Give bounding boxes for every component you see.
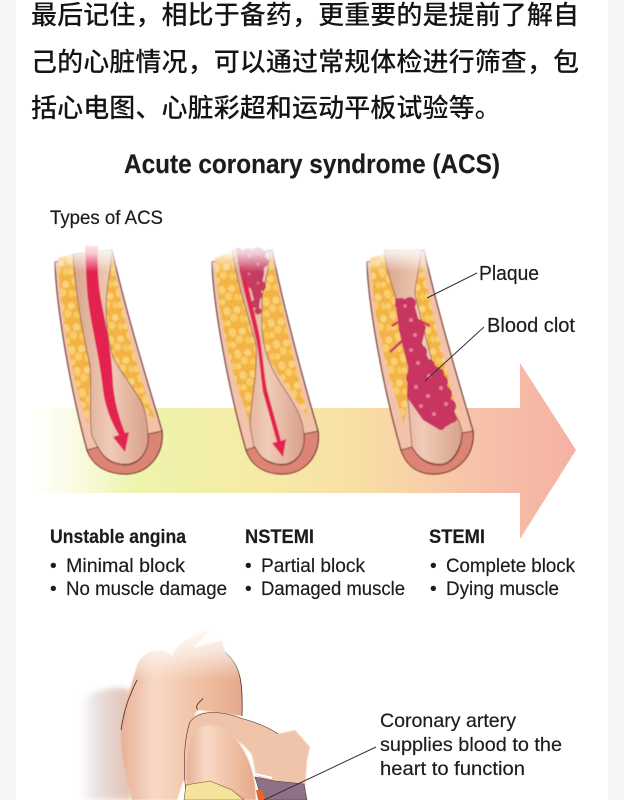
artery: NSTEMI [212, 247, 318, 474]
heart illustration [80, 625, 310, 800]
intro paragraph: 己的心脏情况，可以通过常规体检进行筛查，包 [31, 46, 579, 76]
severity arrow [30, 363, 576, 539]
artery: STEMI [367, 250, 473, 474]
column: NSTEMI: • [245, 579, 252, 600]
white vessel highlight [256, 774, 272, 778]
label: plaque: Plaque [479, 263, 539, 285]
fade over artery tops [45, 238, 435, 272]
label: coronary artery [264, 710, 562, 800]
partial clot [238, 247, 268, 314]
subheading: types of ACS: Types of ACS [50, 207, 163, 229]
column: unstable angina [50, 527, 227, 600]
orange artery [256, 790, 266, 800]
column: unstable angina: Unstable angina [50, 527, 186, 548]
column: NSTEMI: • [245, 556, 252, 577]
column: unstable angina: No muscle damage [66, 579, 227, 600]
complete clot [390, 297, 457, 430]
label: blood clot [425, 315, 575, 381]
pulmonary artery [186, 712, 310, 790]
column: unstable angina: Minimal block [66, 556, 186, 577]
column: NSTEMI: Damaged muscle [261, 579, 405, 600]
label: coronary artery: Coronary artery [380, 710, 516, 732]
label: blood clot: Blood clot [487, 315, 575, 337]
column: STEMI [429, 527, 575, 600]
column: STEMI: Complete block [446, 556, 575, 577]
column: STEMI: Dying muscle [446, 579, 559, 600]
artery: unstable angina [55, 246, 162, 474]
column: STEMI: • [430, 556, 437, 577]
intro paragraph [31, 0, 579, 123]
column: NSTEMI: NSTEMI [245, 527, 314, 548]
label: coronary artery: supplies blood to the [380, 734, 562, 756]
rear vessel [80, 688, 132, 800]
top fade of heart [100, 625, 245, 680]
label: coronary artery: heart to function [380, 758, 525, 780]
intro paragraph: 最后记住，相比于备药，更重要的是提前了解自 [31, 0, 579, 30]
partial blood flow arrow [236, 248, 286, 457]
aorta [121, 628, 242, 800]
column: unstable angina: • [50, 579, 57, 600]
blood flow arrow [85, 246, 129, 452]
column: NSTEMI [245, 527, 405, 600]
title: Acute coronary syndrome (ACS) [124, 149, 500, 179]
fat on heart [184, 781, 244, 800]
column: STEMI: STEMI [429, 527, 485, 548]
column: STEMI: • [430, 579, 437, 600]
column: unstable angina: • [50, 556, 57, 577]
intro paragraph: 括心电图、心脏彩超和运动平板试验等。 [31, 93, 501, 123]
coronary artery vessel [255, 777, 307, 800]
label: plaque [427, 263, 539, 298]
column: NSTEMI: Partial block [261, 556, 365, 577]
